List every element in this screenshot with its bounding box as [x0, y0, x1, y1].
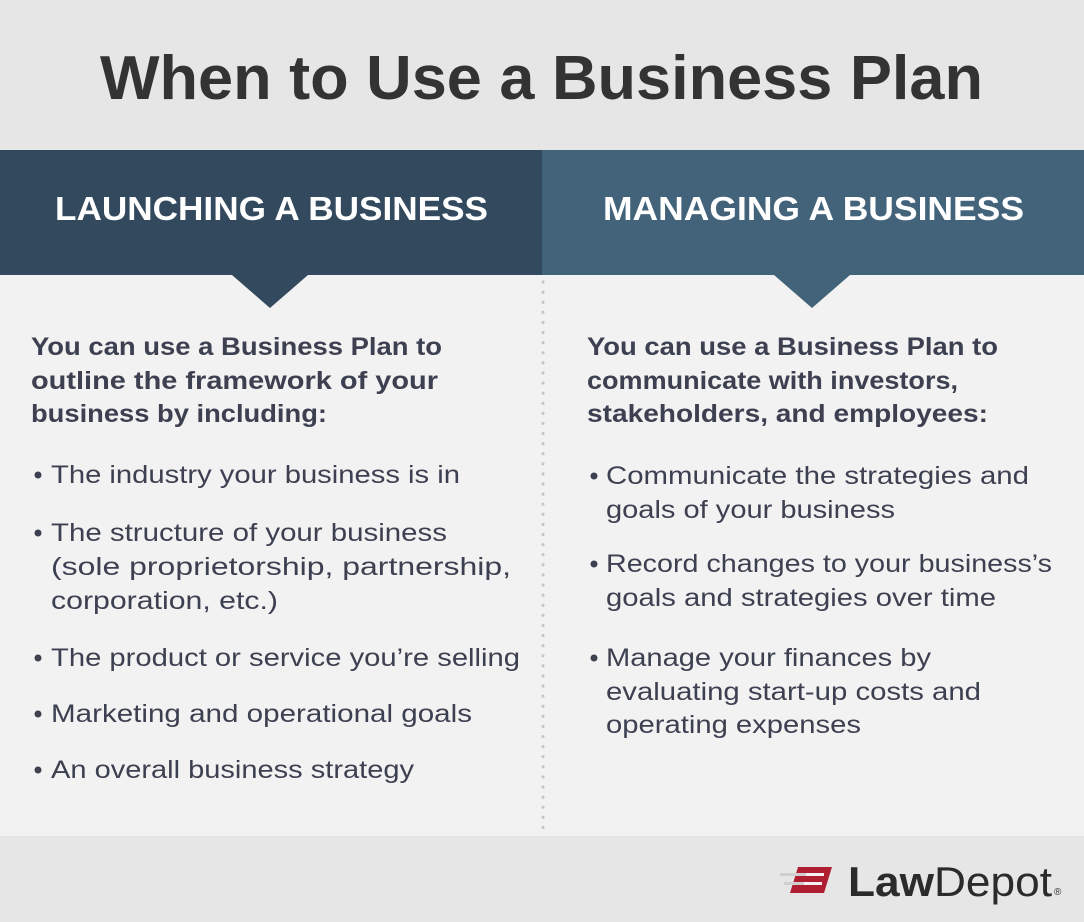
logo: LawDepot: LawDepot [848, 858, 1052, 905]
right column text: Record changes to your business’s [606, 550, 1052, 578]
right column text: You can use a Business Plan to [587, 333, 998, 361]
right column text: Communicate the strategies and [606, 462, 1029, 490]
left column text: You can use a Business Plan to [31, 333, 442, 361]
divider [542, 282, 544, 834]
left column text: business by including: [31, 400, 327, 428]
header: launching [0, 150, 542, 308]
title: When to Use a Business Plan [100, 44, 983, 113]
right column text: goals and strategies over time [606, 584, 996, 612]
right column text: communicate with investors, [587, 367, 958, 395]
right column text: operating expenses [606, 711, 861, 739]
left column text: outline the framework of your [31, 367, 438, 395]
right column text: goals of your business [606, 496, 895, 524]
right column text: Manage your finances by [606, 644, 932, 672]
left column text: corporation, etc.) [51, 587, 278, 615]
left column text: (sole proprietorship, partnership, [51, 553, 511, 581]
header: launching: LAUNCHING A BUSINESS [55, 190, 488, 227]
logo: LawDepot: ® [1054, 887, 1062, 898]
right column text [587, 333, 1052, 739]
left column text: Marketing and operational goals [51, 700, 472, 728]
left column text: The product or service you’re selling [51, 644, 520, 672]
content background [0, 275, 1084, 836]
right column text: stakeholders, and employees: [587, 400, 988, 428]
left column text [31, 333, 520, 784]
left column text: An overall business strategy [51, 756, 415, 784]
right column text: evaluating start-up costs and [606, 678, 981, 706]
left column text: The industry your business is in [51, 461, 460, 489]
header: managing [542, 150, 1084, 308]
left column text: The structure of your business [51, 519, 447, 547]
header: managing: MANAGING A BUSINESS [603, 190, 1024, 227]
